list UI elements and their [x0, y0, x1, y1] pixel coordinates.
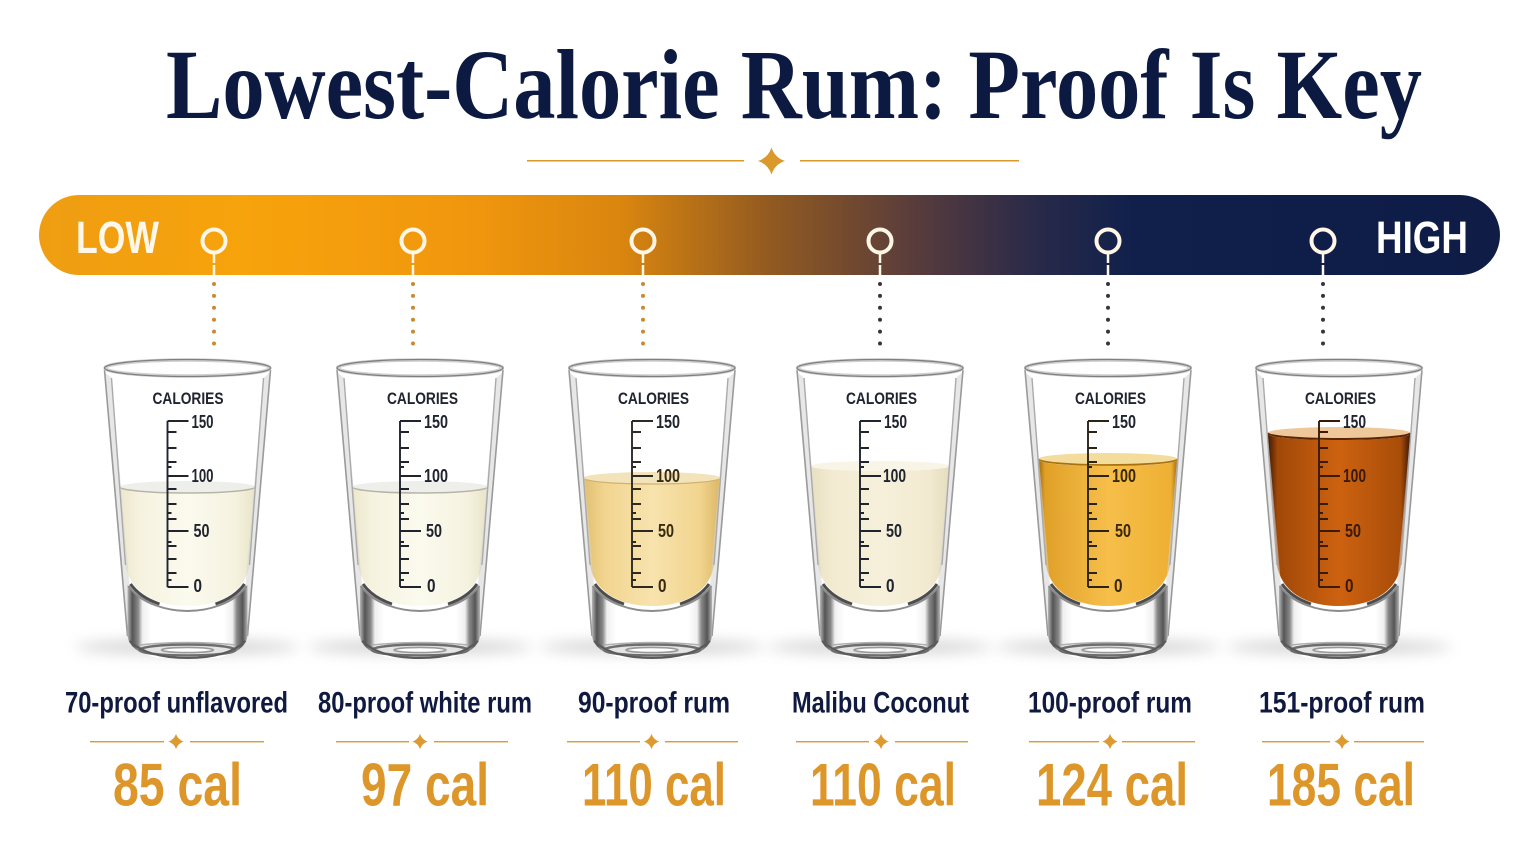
- divider: [90, 734, 264, 749]
- name: 80-proof white rum: [318, 686, 532, 720]
- calorie scale: 0: [194, 576, 202, 596]
- calorie scale: 0: [1345, 576, 1354, 596]
- column: 90-proof rum: [567, 686, 738, 818]
- calorie scale: 0: [1114, 576, 1122, 596]
- calorie scale: 150: [192, 412, 214, 432]
- calorie scale: 50: [426, 521, 442, 541]
- calorie scale: CALORIES: [846, 389, 917, 408]
- name: 70-proof unflavored: [65, 686, 288, 720]
- column: 80-proof white rum: [318, 686, 532, 818]
- calorie scale: [846, 389, 917, 596]
- column: 151-proof rum: [1259, 686, 1425, 818]
- calories: 85 cal: [113, 752, 242, 818]
- glass: 100-proof rum, 124 calories: [1025, 360, 1191, 658]
- calorie scale: CALORIES: [1075, 389, 1146, 408]
- glass: 151-proof rum, 185 calories: [1256, 360, 1422, 658]
- calorie scale: 150: [424, 412, 448, 432]
- name: 151-proof rum: [1259, 686, 1425, 720]
- label: high: HIGH: [1376, 212, 1468, 263]
- column: 70-proof unflavored: [65, 686, 288, 818]
- calorie scale: 100: [1343, 466, 1366, 486]
- calories: 110 cal: [810, 752, 956, 818]
- name: 90-proof rum: [578, 686, 730, 720]
- markers and dotted connectors: [202, 230, 1334, 346]
- calorie scale: [618, 389, 689, 596]
- calorie scale: 100: [883, 466, 906, 486]
- label: low: LOW: [76, 212, 159, 263]
- glass: 90-proof rum, 110 calories: [569, 360, 735, 658]
- calorie scale: [1305, 389, 1376, 596]
- calorie scale: 100: [192, 466, 214, 486]
- calorie scale: 100: [656, 466, 680, 486]
- divider: [567, 734, 738, 749]
- calories: 124 cal: [1036, 752, 1188, 818]
- calorie scale: 50: [658, 521, 674, 541]
- calorie scale: 50: [1115, 521, 1131, 541]
- calories: 185 cal: [1267, 752, 1415, 818]
- calorie scale: 100: [424, 466, 448, 486]
- calorie scale: 100: [1112, 466, 1136, 486]
- calorie scale: 50: [1345, 521, 1361, 541]
- column: Malibu Coconut: [792, 686, 969, 818]
- calorie scale: [387, 389, 458, 596]
- calorie scale: 150: [884, 412, 907, 432]
- calorie scale: CALORIES: [1305, 389, 1376, 408]
- divider: [1262, 734, 1424, 749]
- glass: 70-proof unflavored, 85 calories: [104, 360, 270, 658]
- calories: 110 cal: [582, 752, 726, 818]
- glass: 80-proof white rum, 97 calories: [337, 360, 503, 658]
- calorie scale: [152, 389, 224, 596]
- divider: [336, 734, 508, 749]
- divider: [1029, 734, 1195, 749]
- calorie scale: 0: [427, 576, 436, 596]
- calorie scale: 150: [1112, 412, 1136, 432]
- calories: 97 cal: [361, 752, 489, 818]
- floor shadows: [75, 640, 1451, 654]
- scale bar: low to high: [39, 195, 1500, 346]
- calorie scale: 0: [886, 576, 894, 596]
- name: 100-proof rum: [1028, 686, 1192, 720]
- name: Malibu Coconut: [792, 686, 969, 720]
- calorie scale: 0: [658, 576, 666, 596]
- calorie scale: 50: [194, 521, 210, 541]
- calorie scale: 50: [886, 521, 902, 541]
- calorie scale: 150: [656, 412, 680, 432]
- calorie scale: 150: [1343, 412, 1366, 432]
- calorie scale: CALORIES: [618, 389, 689, 408]
- title divider with star: [527, 148, 1019, 174]
- divider: [796, 734, 968, 749]
- column: 100-proof rum: [1028, 686, 1195, 818]
- calorie scale: CALORIES: [152, 389, 224, 408]
- glass: Malibu Coconut, 110 calories: [797, 360, 963, 658]
- calorie scale: CALORIES: [387, 389, 458, 408]
- calorie scale: [1075, 389, 1146, 596]
